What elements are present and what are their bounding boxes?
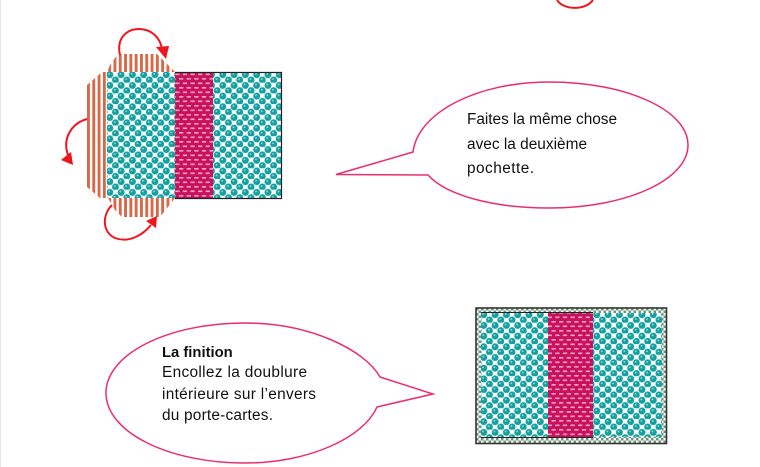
- bubble text: [467, 111, 617, 177]
- right teal panel: [213, 72, 281, 198]
- diagram: open card holder with flaps: [61, 29, 282, 240]
- bubble text: [162, 345, 316, 424]
- speech bubble: second pocket: [336, 82, 688, 208]
- checked lining border: [476, 308, 666, 444]
- page edge line: [0, 0, 2, 467]
- inner outline: [481, 312, 593, 438]
- bubble text: avec la deuxième: [467, 136, 587, 153]
- top flap: [107, 54, 175, 72]
- right teal panel: [593, 313, 662, 437]
- arrow: bottom flap fold: [105, 205, 157, 240]
- left teal panel: [481, 313, 548, 437]
- left teal panel: [107, 72, 175, 198]
- bubble text: intérieure sur l’envers: [162, 386, 316, 403]
- bubble text: pochette.: [467, 160, 534, 177]
- left flap: [87, 72, 107, 198]
- arrow: left flap fold: [61, 119, 87, 165]
- partial arrow arc at top: [557, 0, 593, 8]
- speech bubble: finishing: [106, 323, 433, 463]
- arrow: top flap fold: [119, 29, 169, 59]
- bubble text: La finition: [162, 345, 233, 361]
- central pink band: [548, 313, 593, 437]
- bubble text: du porte-cartes.: [162, 407, 273, 424]
- bottom flap: [108, 198, 175, 217]
- central pink band: [175, 72, 213, 198]
- bubble text: Faites la même chose: [467, 111, 617, 128]
- diagram: finished card holder: [476, 308, 666, 444]
- panel outline: [175, 72, 282, 198]
- bubble text: Encollez la doublure: [162, 364, 307, 381]
